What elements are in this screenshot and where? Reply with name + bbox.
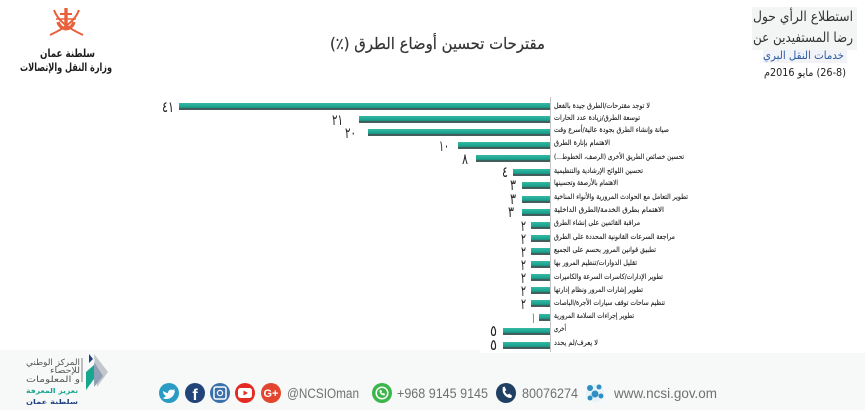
whatsapp number: +968 9145 9145 <box>397 386 488 401</box>
bar: unknown 5: لا يعرف/لم يحدد <box>554 338 598 347</box>
bar: other 5: ٥ <box>490 322 497 340</box>
bar: 3: ٣ <box>508 203 514 221</box>
ministry name <box>20 47 112 74</box>
bar: 20: ٢٠ <box>345 124 356 142</box>
icon: google plus <box>261 383 281 403</box>
icon: facebook: f <box>192 387 198 404</box>
survey heading: استطلاع الرأي حول <box>753 7 853 25</box>
social icons <box>159 383 717 404</box>
bar: 2 <box>521 282 643 300</box>
icon: youtube <box>235 383 255 403</box>
NCSI name: تعزيز المعرفة <box>26 387 78 395</box>
bar: 1: ١ <box>532 309 535 327</box>
NCSI name: للإحصاء <box>50 366 80 376</box>
bar: 2: ٢ <box>521 230 526 248</box>
survey heading <box>752 7 857 79</box>
bar: 8 <box>462 150 684 168</box>
bar: unknown 5 <box>490 336 598 354</box>
survey heading: خدمات النقل البري <box>763 49 844 62</box>
bar: unknown 5: ٥ <box>490 336 497 354</box>
bar: 8: ٨ <box>462 150 468 168</box>
footer band <box>0 350 865 410</box>
survey heading: رضا المستفيدين عن <box>753 30 853 46</box>
bar: 3 <box>510 190 688 208</box>
bar: 3 <box>510 176 618 194</box>
phone number: 80076274 <box>522 386 578 401</box>
bar: 3: ٣ <box>510 176 516 194</box>
bar: 41: لا توجد مقترحات/الطرق جيدة بالفعل <box>554 101 650 110</box>
bar: 20: صيانة وإنشاء الطرق بجودة عالية/أسرع وقت <box>554 124 669 134</box>
bar: 10: ١٠ <box>439 137 449 155</box>
bar: 2: تطوير إشارات المرور ونظام إدارتها <box>554 285 643 294</box>
bar: 4 <box>502 163 643 181</box>
bar: 20 <box>345 124 669 142</box>
bar: 3 <box>508 203 664 221</box>
bar: 21: توسعة الطرق/زيادة عدد الحارات <box>554 113 640 122</box>
title: مقترحات تحسين أوضاع الطرق (٪) <box>330 33 545 54</box>
bar: 2 <box>521 256 637 274</box>
bar: 2 <box>521 269 663 287</box>
bar: 2: ٢ <box>521 282 526 300</box>
bar: 3: الاهتمام بالأرصفة وتحسينها <box>554 178 618 187</box>
NCSI name: و المعلومات <box>26 375 80 385</box>
bar: 21: ٢١ <box>332 111 343 129</box>
icon: national emblem <box>50 8 83 35</box>
bar: 2: تقليل الدوارات/تنظيم المرور بها <box>554 258 637 267</box>
bar: 3: الاهتمام بطرق الخدمة/الطرق الداخلية <box>554 205 664 214</box>
bar: 10: الاهتمام بإنارة الطرق <box>554 138 610 147</box>
bar: 2: ٢ <box>521 269 526 287</box>
bar: 2 <box>521 295 665 313</box>
bar: 2: مراقبة القائمين على إنشاء الطرق <box>554 218 640 227</box>
ministry logo <box>20 8 112 74</box>
NCSI name: سلطنة عمان <box>26 398 78 406</box>
NCSI name: المركز الوطني <box>26 358 80 368</box>
bar: 1: تطوير إجراءات السلامة المرورية <box>554 311 634 320</box>
bar chart <box>162 97 688 354</box>
bar: 1 <box>532 309 634 327</box>
bar: 2: مراجعة السرعات القانونية المحددة على الطرق <box>554 232 675 241</box>
bar: 2: تطوير الإدارات/كاسرات السرعة والكاميرات <box>554 272 663 281</box>
bar: 2 <box>521 243 656 261</box>
bar: 2: ٢ <box>521 217 526 235</box>
bar: 2: ٢ <box>521 256 526 274</box>
survey heading: (26-8) مايو 2016م <box>764 67 846 79</box>
bar: 3: تطوير التعامل مع الحوادث المرورية والأنواء المناخية <box>554 192 688 201</box>
bar: 2: تطبيق قوانين المرور بحسم على الجميع <box>554 245 656 254</box>
bar: other 5: أخرى <box>554 323 566 333</box>
bar: 41: ٤١ <box>162 98 174 116</box>
bar: 2: ٢ <box>521 295 526 313</box>
bar: 4: ٤ <box>502 163 508 181</box>
bar: 10 <box>439 137 610 155</box>
bar: 4: تحسين اللوائح الإرشادية والتنظيمية <box>554 166 643 175</box>
ministry name: سلطنة عمان <box>40 47 95 60</box>
bar: 8: تحسين خصائص الطريق الأخرى (الرصف، الخطوط...) <box>554 152 684 161</box>
NCSI logo <box>26 354 108 406</box>
NCSI name <box>26 358 80 406</box>
icon: facebook <box>185 383 205 404</box>
icon: globe <box>586 384 604 402</box>
bar: other 5 <box>490 322 566 340</box>
bar: 3: ٣ <box>510 190 516 208</box>
icon: whatsapp <box>372 383 392 403</box>
icon: google plus: G+ <box>264 388 278 400</box>
bar: 2: تنظيم ساحات توقف سيارات الأجرة/الباصات <box>554 298 665 307</box>
bar: 41 <box>162 98 650 116</box>
bar: 2 <box>521 230 675 248</box>
icon: NCSI mark <box>86 354 108 390</box>
bar: 2 <box>521 217 640 235</box>
ministry name: وزارة النقل والإتصالات <box>20 61 112 74</box>
bar: 2: ٢ <box>521 243 526 261</box>
twitter handle: @NCSIOman <box>287 386 359 401</box>
icon: instagram <box>210 383 230 403</box>
icon: phone <box>496 383 516 403</box>
website: www.ncsi.gov.om <box>613 386 717 401</box>
icon: twitter <box>159 383 179 403</box>
bar: 21 <box>332 111 640 129</box>
